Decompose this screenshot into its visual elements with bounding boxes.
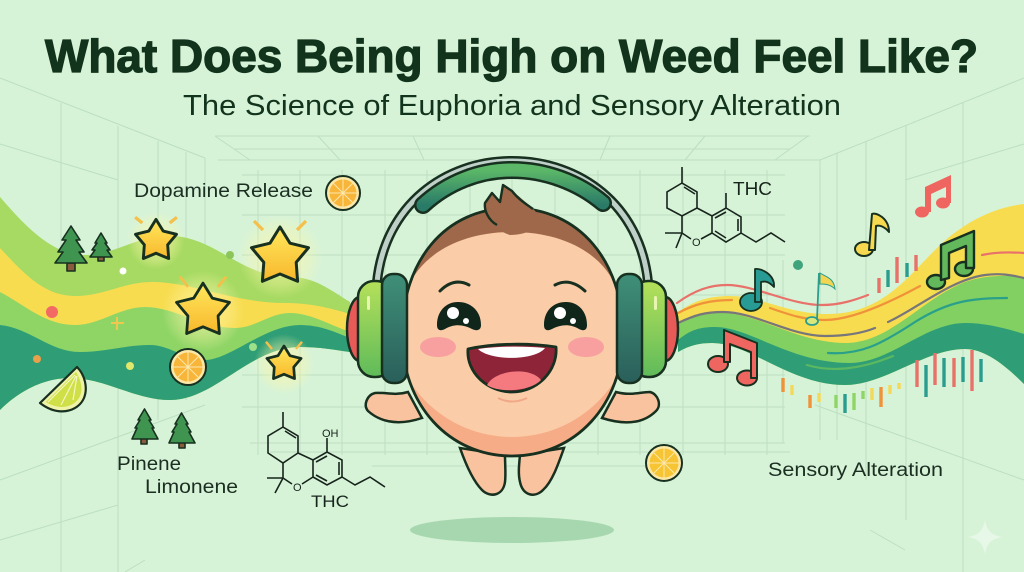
icon: trees upper left — [55, 226, 112, 271]
character — [347, 161, 678, 495]
molecule: THC lower left: OH — [322, 428, 339, 440]
character shadow — [410, 517, 614, 543]
icon: citrus slice lower right of character — [646, 445, 682, 481]
icon: red music note top — [915, 175, 951, 218]
icon: thin teal music note — [806, 273, 835, 325]
right leg — [519, 448, 564, 495]
watermark sparkle — [968, 520, 1002, 554]
icon: teal music note — [740, 269, 774, 311]
title: What Does Being High on Weed Feel Like? — [45, 30, 978, 82]
molecule: THC lower left — [267, 412, 385, 511]
icon: citrus slice on left wave — [170, 349, 206, 385]
equalizer bars — [783, 255, 981, 413]
label: Sensory Alteration: Sensory Alteration — [768, 460, 943, 481]
subtitle: The Science of Euphoria and Sensory Alteration — [183, 90, 841, 122]
icon: lime wedge — [40, 367, 86, 411]
left flowing wave — [0, 197, 350, 410]
molecule: THC upper right: THC — [733, 179, 772, 199]
right arm — [602, 392, 659, 422]
label: Dopamine Release: Dopamine Release — [134, 181, 313, 202]
hair tuft — [485, 185, 537, 235]
left leg — [460, 448, 505, 495]
left ear cup — [347, 297, 373, 361]
icon: red double music note — [708, 330, 757, 386]
star: top large — [238, 215, 322, 299]
head — [408, 212, 616, 455]
star: lower small — [254, 334, 314, 394]
eyes — [437, 302, 481, 330]
star: middle — [162, 270, 244, 352]
star: top small — [127, 212, 185, 270]
icon: citrus slice near Dopamine Release — [326, 176, 360, 210]
molecule: THC lower left: THC — [311, 492, 349, 511]
molecule: THC lower left: O — [293, 482, 302, 494]
cheeks — [420, 337, 456, 357]
headband — [377, 161, 648, 282]
icon: green double music note — [927, 231, 974, 289]
icon: trees lower left — [132, 409, 195, 448]
label: Limonene: Limonene — [145, 476, 238, 498]
right flowing wave — [678, 204, 1024, 385]
eyebrows — [440, 282, 585, 291]
decorative dots — [33, 251, 803, 370]
label: Pinene: Pinene — [117, 453, 181, 475]
right ear cup — [652, 297, 678, 361]
molecule: THC upper right — [665, 167, 785, 249]
molecule: THC upper right: O — [692, 237, 701, 249]
mouth — [468, 344, 556, 392]
sound lines — [677, 252, 1024, 369]
left arm — [366, 392, 422, 422]
icon: yellow music note — [855, 214, 889, 256]
